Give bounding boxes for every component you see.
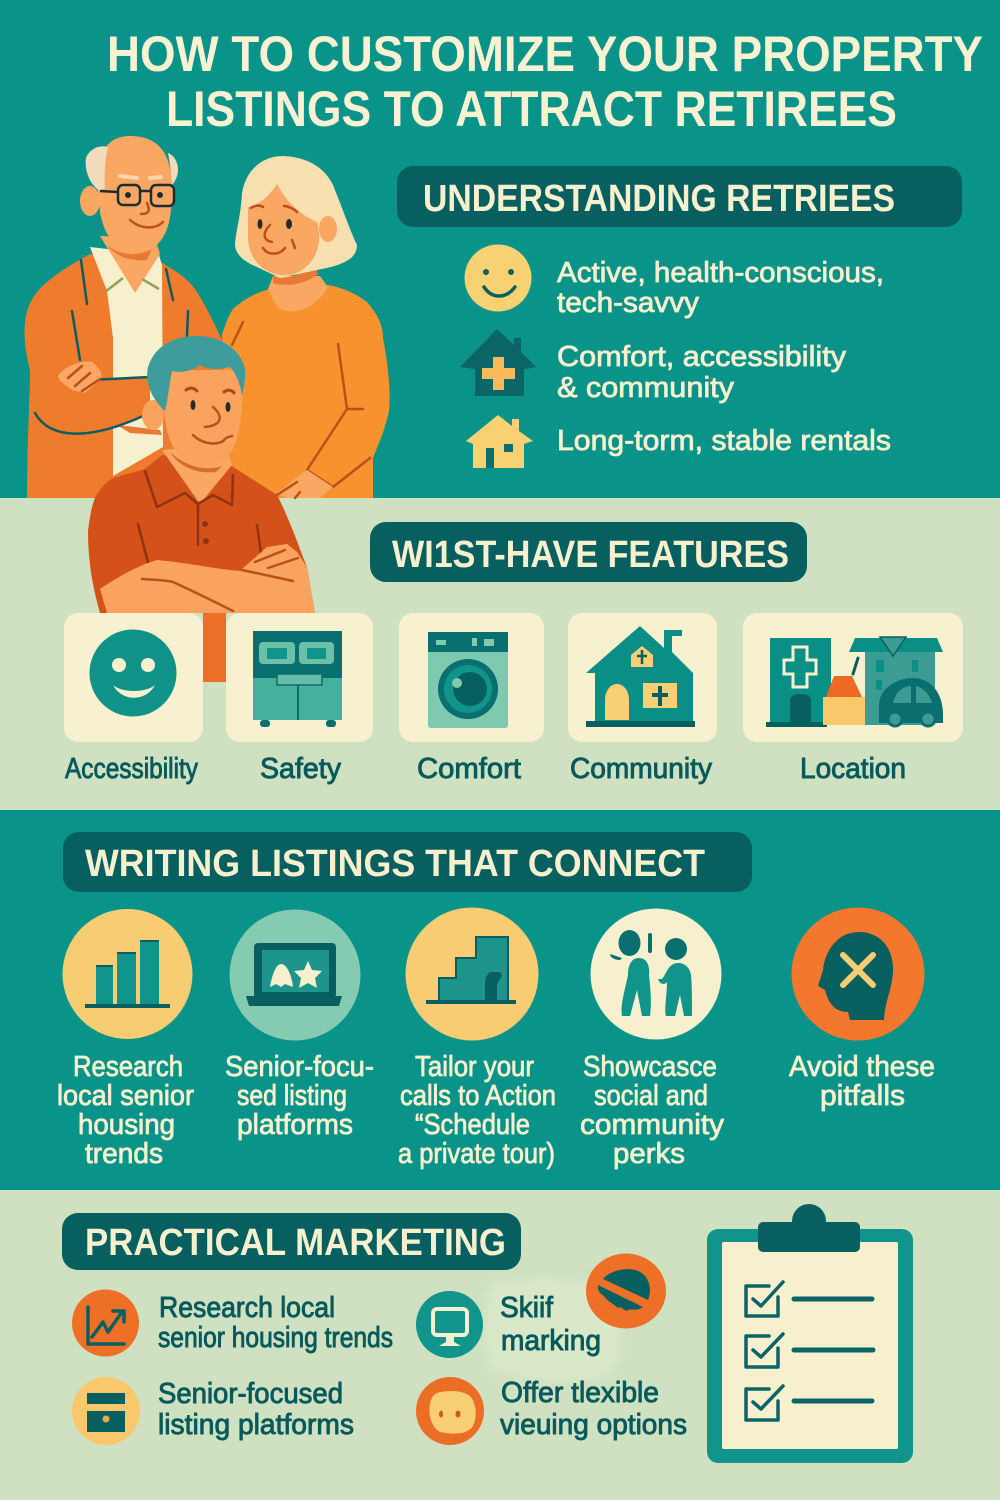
- figure: man with glasses: [25, 136, 240, 498]
- text: research local: senior housing trends: [158, 1322, 393, 1354]
- text: senior-focused platforms: platforms: [237, 1109, 353, 1141]
- card: safety: [226, 613, 373, 742]
- icon: head with x: [792, 908, 924, 1040]
- text: skiif marking: Skiif: [500, 1292, 554, 1324]
- text: showcase perks: community: [580, 1109, 725, 1141]
- text: tailor your calls: calls to Action: [400, 1080, 556, 1112]
- text: tailor your calls: Tailor your: [415, 1051, 534, 1083]
- text: long-term: Long-torm, stable rentals: [557, 425, 891, 457]
- icon: house with cross: [460, 329, 536, 396]
- card: community: [568, 613, 717, 742]
- panel: practical marketing: [62, 1204, 913, 1463]
- icon: bar chart: [62, 909, 192, 1039]
- icon: clipboard checklist: [707, 1204, 913, 1463]
- text: comfort: & community: [557, 372, 735, 404]
- heading: understanding retirees: [397, 166, 962, 227]
- heading: writing listings: [63, 832, 752, 892]
- heading: practical marketing: [62, 1213, 521, 1270]
- text: research local senior housing trends: local senior: [57, 1080, 194, 1112]
- panel: must-have features: [64, 522, 963, 785]
- title: LISTINGS TO ATTRACT RETIREES: [166, 81, 897, 137]
- text: research local senior housing trends: Research: [73, 1051, 183, 1083]
- heading: must-have features: [370, 522, 807, 582]
- panel: writing listings background: [0, 810, 1000, 1190]
- text: senior-focused platforms: sed listing: [237, 1080, 347, 1112]
- panel: must-have features background: [0, 498, 1000, 810]
- figure: woman with white hair: [222, 156, 390, 498]
- text: research local: Research local: [159, 1292, 335, 1324]
- text: comfort: Comfort, accessibility: [557, 341, 847, 373]
- heading: writing listings: WRITING LISTINGS THAT CONNECT: [85, 843, 705, 885]
- heading: practical marketing: PRACTICAL MARKETING: [85, 1222, 506, 1264]
- icon: trend chart: [72, 1290, 139, 1356]
- labels: feature names: Safety: [260, 753, 341, 785]
- labels: feature names: [65, 753, 906, 785]
- panel: practical marketing background: [0, 1190, 1000, 1500]
- heading: understanding retirees: UNDERSTANDING RETRIEES: [423, 178, 895, 220]
- card: comfort: [399, 613, 544, 742]
- card: accessibility: [64, 613, 203, 742]
- text: avoid pitfalls: pitfalls: [820, 1080, 905, 1112]
- panel: understanding retirees: [397, 166, 962, 468]
- smudge behind marking text: [485, 1279, 620, 1380]
- text: research local senior housing trends: [57, 1051, 194, 1170]
- labels: feature names: Community: [570, 753, 712, 785]
- text: active: [557, 257, 884, 319]
- text: avoid pitfalls: Avoid these: [789, 1051, 935, 1083]
- text: senior-focused platforms: [225, 1051, 374, 1141]
- text: tailor your calls: a private tour): [398, 1138, 555, 1170]
- figure: seated man: [88, 336, 315, 682]
- text: comfort: [557, 341, 847, 404]
- illustration: three retirees: [25, 136, 390, 682]
- panel: writing listings that connect: [57, 832, 935, 1170]
- icon: small yellow house: [466, 415, 533, 468]
- text: tailor your calls: “Schedule: [415, 1109, 530, 1141]
- icon: two people talking: [590, 908, 722, 1040]
- icon: orange helmet: [586, 1254, 666, 1328]
- text: showcase perks: Showcasce: [583, 1051, 717, 1083]
- text: showcase perks: perks: [613, 1138, 685, 1170]
- labels: feature names: Accessibility: [65, 753, 198, 785]
- text: offer flexible: [500, 1377, 687, 1441]
- text: senior-focused: Senior-focused: [158, 1378, 343, 1410]
- icon: yellow smiley: [464, 244, 532, 312]
- text: active: tech-savvy: [557, 287, 700, 319]
- text: skiif marking: marking: [501, 1325, 601, 1357]
- labels: feature names: Location: [800, 753, 906, 785]
- card: location: [743, 613, 963, 742]
- heading: must-have features: WI1ST-HAVE FEATURES: [392, 534, 789, 576]
- title: [107, 26, 983, 137]
- text: offer flexible: Offer tlexible: [501, 1377, 659, 1409]
- text: senior-focused: listing platforms: [158, 1409, 354, 1441]
- text: tailor your calls: [398, 1051, 556, 1170]
- text: research local senior housing trends: housing: [78, 1109, 175, 1141]
- panel: top background: [0, 0, 1000, 498]
- text: skiif marking: [500, 1292, 601, 1357]
- icon: stairs: [406, 908, 538, 1040]
- icon: yellow face blob: [416, 1377, 484, 1445]
- labels: feature names: Comfort: [417, 753, 521, 785]
- icon: listing platform: [72, 1377, 140, 1445]
- text: active: Active, health-conscious,: [557, 257, 884, 289]
- text: showcase perks: [580, 1051, 725, 1170]
- text: offer flexible: vieuing options: [500, 1409, 687, 1441]
- icon: laptop: [230, 910, 360, 1040]
- text: senior-focused platforms: Senior-focu-: [225, 1051, 374, 1083]
- text: research local senior housing trends: trends: [85, 1138, 163, 1170]
- text: avoid pitfalls: [789, 1051, 935, 1112]
- icon: monitor: [416, 1291, 483, 1358]
- text: research local: [158, 1292, 393, 1354]
- text: senior-focused: [158, 1378, 354, 1441]
- text: showcase perks: social and: [594, 1080, 708, 1112]
